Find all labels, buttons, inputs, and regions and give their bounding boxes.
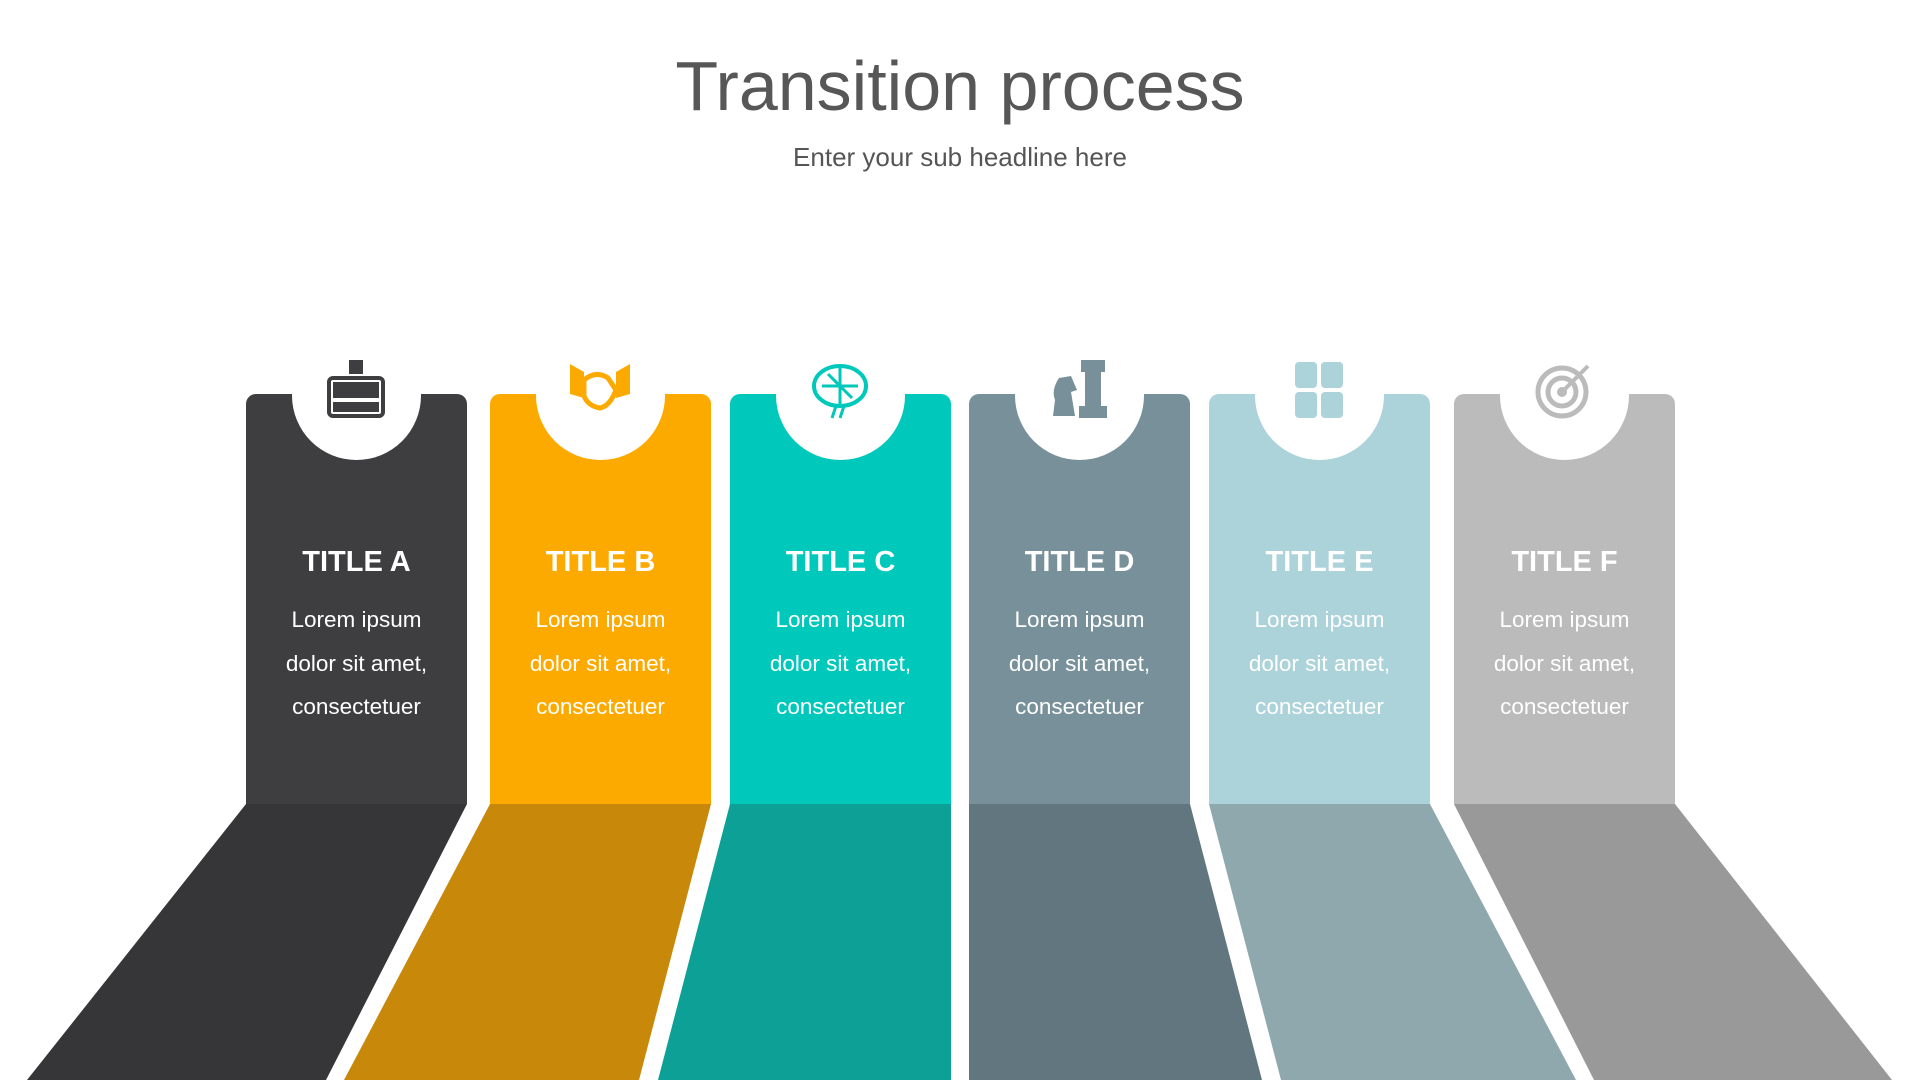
panel F [1454,394,1675,804]
icon: briefcase [327,360,385,418]
panel E: Lorem ipsum [1254,607,1385,632]
icon: brain [812,364,868,418]
panel C [730,394,951,804]
panel D: Lorem ipsum [1014,607,1145,632]
panel A: Lorem ipsum [291,607,422,632]
panel B: dolor sit amet, [530,650,671,676]
icon: hands [1295,362,1343,418]
icon: target [1536,364,1590,418]
title: Transition process [675,47,1245,125]
panel D: dolor sit amet, [1009,650,1150,676]
panel E [1209,394,1430,804]
panel C: dolor sit amet, [770,650,911,676]
icon: chess [1053,360,1107,418]
panel B: TITLE B [546,546,655,578]
panel B: Lorem ipsum [535,607,666,632]
panel C: consectetuer [776,694,905,719]
panel A [246,394,467,804]
panel D [969,394,1190,804]
panel E: consectetuer [1255,694,1384,719]
panel B: consectetuer [536,694,665,719]
subtitle: Enter your sub headline here [793,142,1127,172]
panel E: dolor sit amet, [1249,650,1390,676]
panel F: dolor sit amet, [1494,650,1635,676]
panel E: TITLE E [1266,546,1373,578]
icon: handshake [570,364,630,410]
panel A: dolor sit amet, [286,650,427,676]
panel A: TITLE A [302,546,411,578]
panel D: consectetuer [1015,694,1144,719]
panel C: Lorem ipsum [775,607,906,632]
panel F: Lorem ipsum [1499,607,1630,632]
panel D: TITLE D [1025,546,1134,578]
panel C: TITLE C [786,546,895,578]
panel F: TITLE F [1511,546,1618,578]
panel B [490,394,711,804]
panel A: consectetuer [292,694,421,719]
panel F: consectetuer [1500,694,1629,719]
